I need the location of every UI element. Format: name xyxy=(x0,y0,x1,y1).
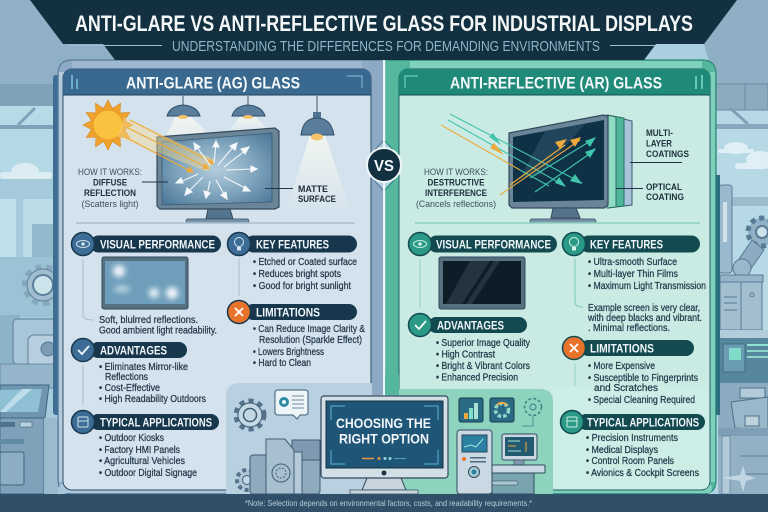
limitations list (AR) xyxy=(588,361,698,406)
callout: how it works diffuse reflection: REFLECTION xyxy=(84,188,136,199)
section heading: LIMITATIONS xyxy=(256,308,320,320)
applications list xyxy=(99,433,197,479)
callout: multi-layer coatings: LAYER xyxy=(646,138,672,150)
illustration: anti-reflective monitor with layers xyxy=(415,114,700,223)
advantages list: • Bright & Vibrant Colors xyxy=(436,361,530,372)
panel: bottom right list background xyxy=(553,386,709,489)
limitations list: • Hard to Clean xyxy=(253,358,311,369)
limitations list: • Can Reduce Image Clarity & xyxy=(253,324,365,335)
section: visual performance (AR) xyxy=(408,232,557,309)
callout: matte surface: MATTE xyxy=(298,184,328,195)
callout: optical coating xyxy=(616,182,684,203)
callout: how it works destructive interference: (Cancels reflections) xyxy=(416,199,496,210)
applications list: • Agricultural Vehicles xyxy=(99,456,185,467)
section heading: KEY FEATURES xyxy=(256,240,329,252)
header: anti-glare glass: ANTI-GLARE (AG) GLASS xyxy=(126,74,300,92)
icon: target gear xyxy=(522,398,542,426)
lamps xyxy=(152,96,352,215)
limitations list xyxy=(253,324,365,369)
title banner xyxy=(30,0,737,60)
centre divider line xyxy=(383,60,385,380)
section heading: KEY FEATURES xyxy=(590,240,663,252)
advantages list: Reflections xyxy=(105,372,148,383)
callout: how it works destructive interference xyxy=(416,167,496,210)
advantages list xyxy=(99,362,206,405)
panel: anti-glare frame xyxy=(53,60,384,494)
section heading: TYPICAL APPLICATIONS xyxy=(100,418,212,430)
advantages list: • Enhanced Precision xyxy=(436,372,518,384)
small terminal xyxy=(492,434,545,494)
applications list: • Avionics & Cockpit Screens xyxy=(586,468,699,479)
callout: how it works diffuse reflection: HOW IT WORKS: xyxy=(78,167,142,178)
callout: optical coating: OPTICAL xyxy=(646,182,682,193)
footer note bar xyxy=(0,494,768,512)
section: advantages (AG) xyxy=(72,338,206,405)
section heading xyxy=(560,410,705,434)
scattered reflection arrows xyxy=(176,141,257,199)
advantages list: • Cost-Effective xyxy=(99,383,160,394)
key features list: • Multi-layer Thin Films xyxy=(588,269,678,280)
section heading: LIMITATIONS xyxy=(590,344,654,356)
section heading: ADVANTAGES xyxy=(437,320,504,332)
limitations list (AR): and Scratches xyxy=(594,383,658,394)
callout: multi-layer coatings: COATINGS xyxy=(646,149,689,160)
callout: how it works diffuse reflection: DIFFUSE xyxy=(93,178,127,188)
monitor heading: RIGHT OPTION xyxy=(339,430,429,446)
key features list: • Reduces bright spots xyxy=(253,269,341,280)
note text: *Note: Selection depends on environmental factors, costs, and readability requirements.* xyxy=(245,498,533,508)
applications list: • Control Room Panels xyxy=(586,456,674,467)
key features list xyxy=(588,257,706,292)
advantages list: • Superior Image Quality xyxy=(436,338,530,349)
visual performance description: Good ambient light readability. xyxy=(99,326,217,336)
header: anti-reflective glass xyxy=(399,69,710,95)
sparkle xyxy=(722,466,756,492)
limitations list (AR): • Special Cleaning Required xyxy=(588,395,695,406)
background: kiosk left xyxy=(0,385,58,494)
callout: multi-layer coatings: MULTI- xyxy=(646,128,673,139)
advantages list: • High Contrast xyxy=(436,350,495,360)
limitations list (AR): • Susceptible to Fingerprints xyxy=(588,373,698,384)
monitor heading: CHOOSING THE xyxy=(336,415,431,431)
background: factory interior right xyxy=(704,0,768,512)
advantages list: • Eliminates Mirror-like xyxy=(99,362,188,373)
applications list xyxy=(586,433,699,479)
example screen description: Example screen is very clear, xyxy=(588,303,700,314)
key features list: • Maximum Light Transmission xyxy=(588,281,706,292)
clear example screen xyxy=(439,257,525,309)
example screen description xyxy=(587,303,702,334)
section: key features (AG) xyxy=(228,232,357,296)
section heading: TYPICAL APPLICATIONS xyxy=(587,418,699,430)
visual performance description xyxy=(99,315,217,336)
incoming and reflected light rays xyxy=(441,114,595,195)
monitor xyxy=(509,115,608,223)
panel: choosing the right option zone xyxy=(226,375,553,494)
background: machine left xyxy=(0,319,58,388)
section: typical applications (AR) xyxy=(560,410,705,479)
matte example screen xyxy=(102,257,188,309)
section heading xyxy=(72,232,221,256)
advantages list: • High Readability Outdoors xyxy=(99,394,206,405)
background: gear left xyxy=(25,267,61,303)
monitor heading xyxy=(336,415,431,446)
section heading xyxy=(72,410,219,434)
callout: how it works destructive interference: HOW IT WORKS: xyxy=(424,167,488,178)
header: anti-glare glass xyxy=(63,69,371,95)
icon: chat bubble with chart xyxy=(275,390,308,419)
icon: bar chart tile xyxy=(459,398,483,422)
key features list xyxy=(253,257,357,292)
left machinery illustration xyxy=(236,401,320,494)
section heading: ADVANTAGES xyxy=(100,346,167,358)
monitor: choosing the right option xyxy=(321,396,448,494)
section heading: VISUAL PERFORMANCE xyxy=(436,240,551,252)
applications list: • Precision Instruments xyxy=(586,433,678,444)
callout: matte surface: SURFACE xyxy=(298,194,336,205)
sun rays xyxy=(118,117,215,172)
callout: how it works destructive interference: INTERFERENCE xyxy=(425,188,487,199)
limitations list: Resolution (Sparkle Effect) xyxy=(259,335,362,346)
callout: matte surface xyxy=(265,184,336,205)
key features list: • Etched or Coated surface xyxy=(253,257,357,268)
background: factory interior left xyxy=(0,0,384,512)
section heading xyxy=(562,232,700,256)
limitations list: • Lowers Brightness xyxy=(253,347,324,358)
section heading: VISUAL PERFORMANCE xyxy=(100,240,215,252)
section: limitations (AR) xyxy=(562,336,694,405)
panel: anti-reflective frame xyxy=(384,60,720,494)
monitor xyxy=(157,128,279,223)
applications list: • Outdoor Kiosks xyxy=(99,433,164,444)
key features list: • Ultra-smooth Surface xyxy=(588,257,677,268)
callout: how it works destructive interference: DESTRUCTIVE xyxy=(428,178,484,188)
limitations list (AR): • More Expensive xyxy=(588,361,655,372)
section: typical applications (AG) xyxy=(72,410,219,479)
applications list: • Outdoor Digital Signage xyxy=(99,468,197,479)
section heading xyxy=(408,232,557,256)
callout: multi-layer coatings xyxy=(630,128,689,162)
visual performance description: Soft, blulrred reflections. xyxy=(99,315,198,326)
example screen description: with deep blacks and vibrant. xyxy=(587,313,702,324)
key features list: • Good for bright sunlight xyxy=(253,281,351,292)
coating layers xyxy=(607,115,632,208)
sun xyxy=(83,100,133,150)
vs badge: VS xyxy=(374,158,394,175)
callout: how it works diffuse reflection xyxy=(78,167,168,210)
section: key features (AR) xyxy=(562,232,706,334)
section: advantages (AR) xyxy=(408,314,530,384)
vs badge xyxy=(367,148,401,182)
subtitle: UNDERSTANDING THE DIFFERENCES FOR DEMANDING ENVIRONMENTS xyxy=(172,39,600,55)
illustration: anti-glare monitor with sun and lamps xyxy=(76,96,355,223)
applications list: • Medical Displays xyxy=(586,445,658,456)
icon: gear tile xyxy=(490,398,514,422)
header: anti-reflective glass: ANTI-REFLECTIVE (AR) GLASS xyxy=(450,74,662,92)
advantages list xyxy=(436,338,530,384)
background: machines right xyxy=(718,275,768,494)
section: visual performance (AG) xyxy=(72,232,221,336)
callout: how it works diffuse reflection: (Scatters light) xyxy=(82,199,138,210)
example screen description: . Minimal reflections. xyxy=(588,323,670,334)
applications list: • Factory HMI Panels xyxy=(99,445,180,456)
background: column and robot arm right xyxy=(719,185,768,277)
controller unit xyxy=(457,430,492,494)
callout: optical coating: COATING xyxy=(646,192,684,203)
section: limitations (AG) xyxy=(228,300,365,369)
